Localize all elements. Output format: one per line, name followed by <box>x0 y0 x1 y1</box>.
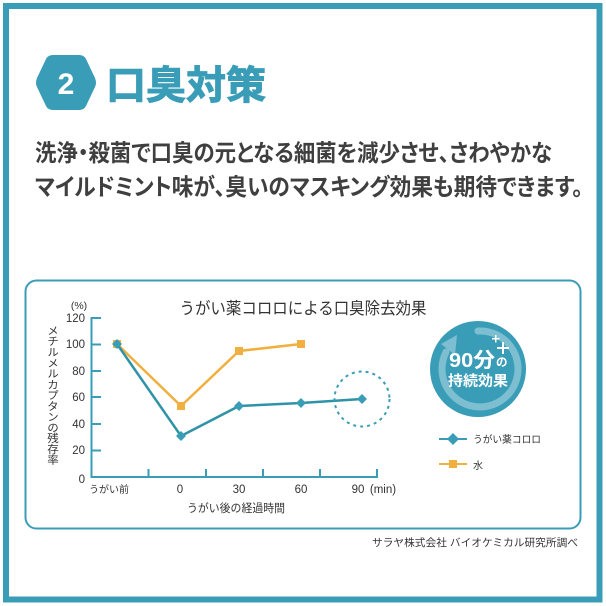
legend <box>439 433 541 472</box>
y axis labels: 80 <box>72 366 85 378</box>
badge: 90 minute lasting effect: の <box>496 357 508 369</box>
badge: 90 minute lasting effect: 90分 <box>449 349 496 372</box>
axes <box>91 318 377 477</box>
heading text: 口臭対策 <box>106 65 266 108</box>
y axis labels: 120 <box>66 313 85 325</box>
icon: hexagon number badge <box>36 55 96 110</box>
chart title: うがい薬コロロによる口臭除去効果 <box>180 299 426 318</box>
y axis labels <box>66 313 85 486</box>
line chart <box>46 300 396 515</box>
y axis labels: 0 <box>79 474 85 486</box>
y axis unit: (%) <box>71 300 87 312</box>
description text <box>35 140 583 200</box>
icon: sparkles <box>492 335 509 354</box>
icon: circular arrow <box>442 331 518 407</box>
x axis labels: 60 <box>295 484 307 496</box>
series: gargle <box>112 339 367 441</box>
x axis labels: うがい前 <box>89 483 129 496</box>
x axis labels: 30 <box>233 484 245 496</box>
panel: chart panel <box>26 280 580 528</box>
y axis labels: 100 <box>66 339 85 351</box>
description text: 洗浄・殺菌で口臭の元となる細菌を減少させ、さわやかな <box>35 140 552 166</box>
x axis labels: 0 <box>177 484 183 496</box>
dashed highlight circle <box>334 372 390 426</box>
section heading <box>36 55 266 110</box>
y axis labels: 60 <box>72 392 85 404</box>
badge: 90 minute lasting effect: 持続効果 <box>448 373 509 390</box>
x axis title: うがい後の経過時間 <box>187 501 285 515</box>
source note: サラヤ株式会社 バイオケミカル研究所調べ <box>372 536 578 549</box>
series: water <box>113 340 305 410</box>
badge: 90 minute lasting effect <box>430 321 526 417</box>
y axis labels: 20 <box>72 445 85 457</box>
legend: うがい薬コロロ <box>473 433 541 446</box>
legend: 水 <box>473 460 483 472</box>
x axis labels <box>89 483 396 496</box>
x axis labels: 90 <box>352 484 364 496</box>
y axis labels: 40 <box>72 419 85 431</box>
x axis labels: (min) <box>370 484 396 496</box>
y axis title: メチルメルカプタンの残存率 <box>46 325 59 466</box>
icon: hexagon number badge: 2 <box>58 68 74 101</box>
